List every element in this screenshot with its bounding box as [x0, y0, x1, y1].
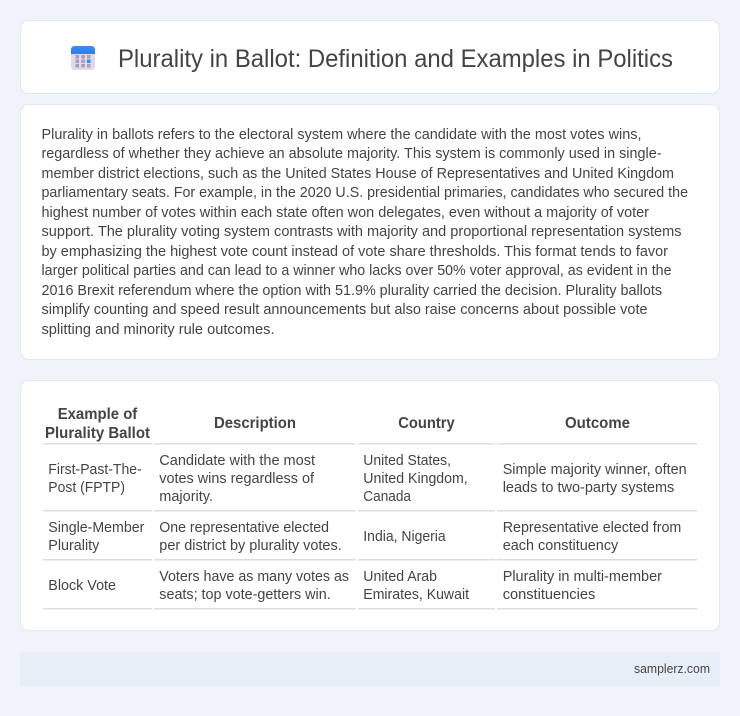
table row: Single-Member Plurality: One representative elected [159, 520, 329, 536]
table row: First-Past-The-Post: leads to two-party systems [503, 480, 674, 496]
table header: Country [398, 415, 455, 432]
table header: Plurality Ballot [45, 425, 150, 442]
table row: First-Past-The-Post: Simple majority winner, often [503, 462, 687, 478]
text block: description paragraph: parliamentary seats. For example, in the 2020 U.S. presidential primaries, candidates who secured the [42, 185, 688, 201]
table row: Single-Member Plurality: Single-Member [48, 520, 144, 536]
table row: Block Vote: Block Vote [48, 578, 116, 594]
table row: Block Vote: Plurality in multi-member [503, 569, 662, 585]
table row: First-Past-The-Post: United Kingdom, [363, 471, 468, 487]
text block: description paragraph: simplify counting and speed result announcements but also raise concerns about possible vote [42, 302, 648, 318]
table row: First-Past-The-Post: Post (FPTP) [48, 480, 125, 496]
text block: description paragraph: larger political parties and can lead to a winner who lacks over 50% voter approval, as evident in the [42, 263, 672, 279]
footer text: samplerz.com [634, 662, 710, 676]
table header: Description [214, 415, 296, 432]
table row: First-Past-The-Post: Candidate with the most [159, 453, 315, 469]
text block: description paragraph: member district elections, such as the United States House of Representatives and United Kingdom [42, 166, 674, 182]
text block: description paragraph: regardless of whether they achieve an absolute majority. This system is commonly used in single- [42, 146, 662, 162]
table row: Single-Member Plurality: Plurality [48, 538, 100, 554]
table row: Single-Member Plurality: each constituency [503, 538, 619, 554]
table row: Block Vote: Emirates, Kuwait [363, 587, 469, 603]
table row: Single-Member Plurality [48, 520, 681, 554]
text block: description paragraph: highest number of votes within each state often won delegates, even without a majority of voter [42, 205, 649, 221]
table row: First-Past-The-Post: votes wins regardless of [159, 471, 315, 487]
footer bar [20, 652, 720, 686]
table row: First-Past-The-Post [48, 453, 687, 505]
icon: calendar [71, 46, 95, 70]
text block: description paragraph [42, 127, 688, 338]
table row: Single-Member Plurality: Representative elected from [503, 520, 681, 536]
table row: First-Past-The-Post: Canada [363, 489, 412, 505]
table row: Block Vote: Voters have as many votes as [159, 569, 349, 585]
text block: description paragraph: Plurality in ballots refers to the electoral system where the candidate with the most votes wins, [42, 127, 642, 143]
title: Plurality in Ballot: Definition and Examples in Politics [118, 45, 673, 73]
text block: description paragraph: by emphasizing the highest vote count instead of vote share thresholds. This format tends to favor [42, 244, 668, 260]
text block: description paragraph: support. The plurality voting system contrasts with majority and proportional representation systems [42, 224, 682, 240]
table header [45, 406, 630, 442]
table row: First-Past-The-Post: First-Past-The- [48, 462, 142, 478]
panel: title card [20, 20, 720, 94]
table row: Single-Member Plurality: India, Nigeria [363, 529, 447, 545]
panel: description card [20, 104, 720, 360]
table row: Block Vote: seats; top vote-getters win. [159, 587, 331, 603]
panel: table card [20, 380, 720, 630]
table header: Example of [58, 406, 138, 423]
table row: First-Past-The-Post: United States, [363, 453, 451, 469]
table row: Block Vote: United Arab [363, 569, 437, 585]
text block: description paragraph: splitting and minority rule outcomes. [42, 322, 274, 338]
table header: Outcome [565, 415, 630, 432]
text block: description paragraph: 2016 Brexit referendum where the option with 51.9% plurality carried the decision. Plurality ballots [42, 283, 662, 299]
table row: Single-Member Plurality: per district by plurality votes. [159, 538, 342, 554]
table row: Block Vote [48, 569, 662, 603]
table row: Block Vote: constituencies [503, 587, 595, 603]
table row: First-Past-The-Post: majority. [159, 489, 213, 505]
